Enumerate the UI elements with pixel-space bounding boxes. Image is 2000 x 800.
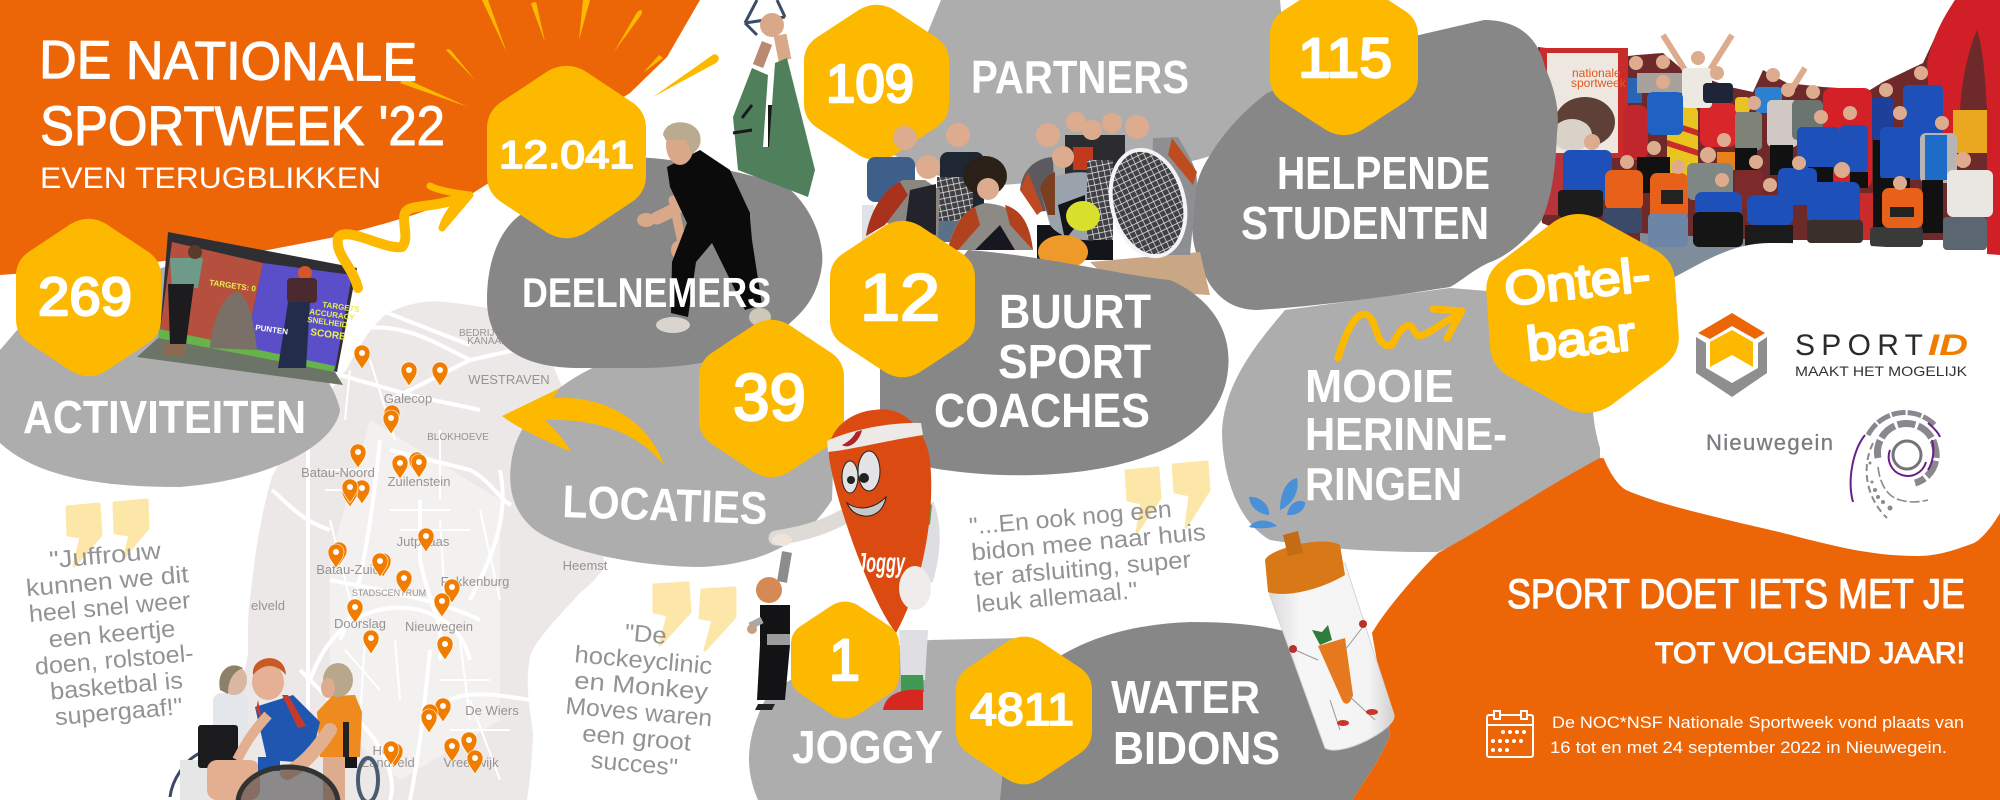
screen text: TARGETS: 0: [209, 278, 257, 294]
photo: person with arms raised: [733, 0, 815, 197]
stat labels: DEELNEMERS: [522, 269, 771, 316]
right boy: [317, 663, 378, 800]
panel: table behind partners: [1090, 252, 1210, 295]
quote: Juffrouw: supergaaf!": [54, 693, 184, 731]
hexagon numbers: Ontel-: [1502, 249, 1653, 317]
panel: joggy blob: [749, 638, 1020, 800]
stat labels: JOGGY: [792, 721, 943, 773]
hexagon numbers: 115: [1298, 26, 1392, 89]
logo: SportID: SPORT: [1795, 329, 1923, 362]
panel: helpende studenten blob: [1192, 20, 1558, 310]
map labels: WESTRAVEN: [468, 372, 550, 387]
stat labels: BIDONS: [1113, 722, 1280, 774]
sun burst rays: [400, 0, 719, 107]
photo: partners group: [862, 112, 1197, 269]
title: [39, 30, 445, 195]
map labels: Heemst: [563, 558, 608, 573]
quote: Juffrouw: "Juffrouw: [48, 537, 163, 574]
pin centres: [333, 350, 478, 761]
arrow: squiggle to ontelbaar: [1338, 309, 1462, 358]
hexagon: 115: [1270, 0, 1418, 135]
screen text: ACCURACY: [309, 307, 356, 322]
quote: hockeyclinic: en Monkey: [573, 667, 709, 706]
hexagon: 39: [699, 320, 844, 477]
hexagon: ontelbaar: [1481, 208, 1684, 419]
quote: hockeyclinic: succes": [590, 747, 679, 781]
quote: Juffrouw: doen, rolstoel-: [34, 640, 195, 681]
quote: Juffrouw: basketbal is: [49, 667, 184, 706]
quote: bidon: [968, 493, 1211, 618]
quote: hockeyclinic: Moves waren: [565, 693, 713, 732]
map labels: STADSCENTRUM: [352, 588, 426, 598]
photo: game screen: [137, 232, 361, 385]
logo: Nieuwegein: Nieuwegein: [1706, 430, 1833, 455]
stat labels: RINGEN: [1305, 458, 1462, 510]
bottle with water splash: [1249, 478, 1394, 750]
logo: Nieuwegein: [1706, 413, 1940, 518]
title: EVEN TERUGBLIKKEN: [40, 162, 381, 195]
quote: bidon: bidon mee naar huis: [970, 519, 1207, 566]
floor: [1640, 233, 1760, 278]
map labels: Hoog: [372, 743, 404, 758]
stat labels: LOCATIES: [562, 475, 768, 534]
big racket: [1100, 142, 1196, 264]
photo: child high-five: [747, 552, 790, 710]
event banner: [1547, 53, 1627, 153]
logo: SportID: ID: [1928, 329, 1968, 362]
back row people: [1627, 35, 1957, 233]
right player: [278, 266, 317, 368]
quote: hockeyclinic: hockeyclinic: [574, 641, 713, 680]
map labels: Galecop: [384, 391, 432, 406]
stat labels: PARTNERS: [971, 51, 1189, 103]
water drops: [1249, 478, 1305, 528]
logo: SportID: [1696, 313, 1968, 397]
map labels: Nieuwegein: [405, 619, 473, 634]
photo: woman participant: [637, 122, 771, 333]
map pins: [328, 345, 483, 774]
quote: Juffrouw: [23, 535, 201, 733]
map labels: De Wiers: [465, 703, 519, 718]
stat labels: HERINNE-: [1305, 408, 1507, 460]
tennis ball: [1066, 201, 1100, 231]
quote: Juffrouw: heel snel weer: [28, 587, 191, 628]
stat labels: COACHES: [934, 385, 1150, 438]
hexagon numbers: 269: [38, 267, 132, 327]
stat labels: BUURT: [999, 286, 1151, 339]
hexagon: 109: [804, 5, 949, 160]
map labels: elveld: [251, 598, 285, 613]
screen text: SCORE: [310, 327, 347, 343]
screen text: PUNTEN: [255, 323, 289, 337]
panel: mooie herinneringen blob: [1222, 288, 1600, 552]
panel: activiteiten blob: [0, 265, 340, 487]
hexagon numbers: [38, 26, 1653, 735]
map labels: Batau-Zuid: [316, 562, 380, 577]
map labels: Batau-Noord: [301, 465, 375, 480]
stat labels: STUDENTEN: [1241, 197, 1489, 249]
arrow: locaties: [502, 388, 664, 465]
boy in blue: [207, 658, 330, 800]
stat labels: [23, 51, 1507, 774]
hexagon numbers: 39: [733, 360, 806, 434]
quote: bidon: ter afsluiting, super: [973, 546, 1192, 592]
orange ball: [1038, 235, 1088, 269]
quote: hockeyclinic: "De: [624, 619, 668, 650]
hexagon numbers: 1: [829, 628, 860, 693]
quote: bidon: leuk allemaal.": [975, 577, 1139, 618]
panel: white logo area: [1593, 243, 2000, 556]
panel: deelnemers blob: [487, 157, 822, 368]
map labels: Vreeswijk: [443, 755, 499, 770]
left player: [163, 245, 203, 356]
closing headline: [1507, 570, 1965, 670]
hexagon: 12.041: [487, 66, 646, 238]
photo: volunteer team: [1538, 0, 2000, 278]
screen text: SNELHEID: [307, 315, 348, 330]
panel: orange footer background: [1352, 458, 2000, 800]
panel: locaties blob: [510, 340, 834, 567]
title: SPORTWEEK '22: [40, 94, 445, 157]
event note: [1550, 713, 1964, 757]
mascot: Joggy carrot: [772, 409, 932, 710]
stat labels: ACTIVITEITEN: [23, 391, 306, 443]
arrow: squiggle to 12.041: [338, 186, 470, 288]
map labels: BEDRIJVEN: [459, 328, 515, 339]
panel: buurt sport coaches blob: [880, 250, 1229, 475]
hexagon numbers: 109: [826, 54, 914, 114]
stat labels: WATER: [1111, 671, 1260, 723]
hexagon: 12: [830, 221, 975, 377]
stat labels: MOOIE: [1305, 360, 1454, 412]
hexagon: 1: [791, 602, 899, 718]
quote: hockeyclinic: een groot: [581, 720, 692, 757]
panel: water bidons blob: [1000, 622, 1390, 800]
quote: hockeyclinic: [560, 615, 720, 784]
quote: Juffrouw: een keertje: [48, 616, 176, 653]
panel: orange title background: [0, 0, 700, 275]
screen text: TARGETS: [322, 300, 361, 314]
quote marks: [67, 462, 1209, 650]
stat labels: SPORT: [998, 336, 1151, 389]
hexagon numbers: 12: [860, 260, 940, 334]
stat labels: HELPENDE: [1277, 147, 1490, 199]
event note: 16 tot en met 24 september 2022 in Nieuwegein.: [1550, 738, 1947, 757]
faces: [1584, 51, 1971, 192]
map labels: Doorslag: [334, 616, 386, 631]
hexagon numbers: baar: [1524, 307, 1638, 372]
quote: Juffrouw: kunnen we dit: [25, 561, 190, 602]
closing headline: TOT VOLGEND JAAR!: [1655, 637, 1965, 670]
quote: bidon: "...En ook nog een: [968, 496, 1173, 540]
hexagon numbers: 12.041: [499, 134, 634, 177]
hexagon: 269: [16, 219, 161, 376]
map labels: [251, 328, 608, 770]
hexagon: 4811: [956, 637, 1092, 784]
map labels: Jutphaas: [397, 534, 450, 549]
logo: SportID: MAAKT HET MOGELIJK: [1795, 363, 1968, 379]
mascot name: Joggy: [857, 547, 906, 578]
red arch: [1927, 0, 2000, 255]
event banner: sportweek: [1571, 76, 1627, 90]
title: DE NATIONALE: [39, 30, 417, 93]
event note: De NOC*NSF Nationale Sportweek vond plaats van: [1552, 713, 1964, 732]
photo: kids in wheelchairs: [170, 658, 378, 800]
screen text: [209, 278, 361, 343]
icon: calendar: [1487, 711, 1533, 757]
event banner: nationale: [1572, 66, 1621, 80]
map labels: BLOKHOEVE: [427, 432, 489, 443]
hexagon numbers: 4811: [970, 684, 1074, 735]
map labels: KANAAL: [467, 336, 507, 347]
map labels: Fokkenburg: [441, 574, 509, 589]
heads: [893, 112, 1149, 200]
map of Nieuwegein with pins: [200, 301, 608, 800]
bottle carrot icon: [1318, 638, 1353, 704]
panel: partners blob: [880, 0, 1290, 185]
front row people: [1558, 150, 1993, 250]
map labels: Zuilenstein: [388, 474, 450, 489]
map labels: Zandveld: [361, 755, 415, 770]
